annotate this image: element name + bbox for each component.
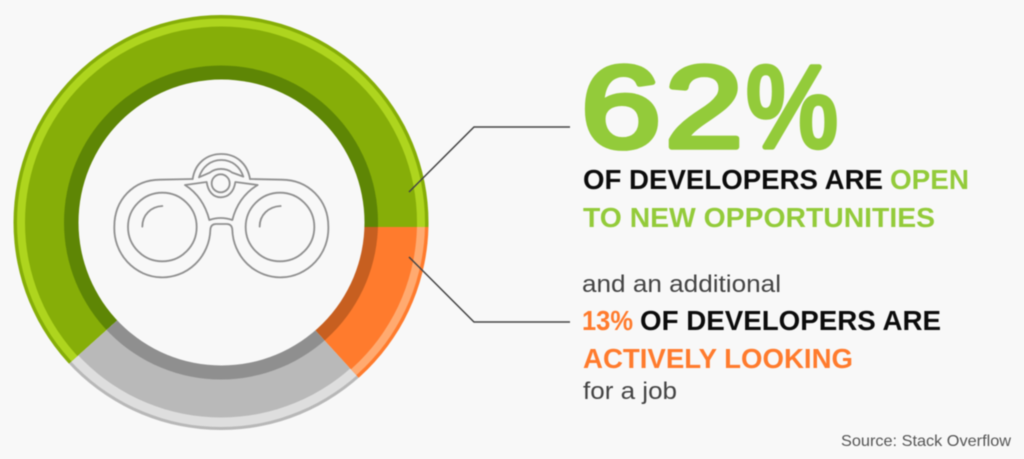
donut chart	[14, 15, 428, 430]
big statistic: 62%: %	[746, 42, 838, 172]
text block: open to new opportunities: OPEN	[890, 164, 969, 195]
big statistic: 62%	[581, 42, 838, 172]
text block: open to new opportunities: TO NEW OPPORTUNITIES	[583, 202, 935, 233]
leader line: 62% callout	[409, 127, 570, 192]
text block: actively looking: 13%	[582, 305, 633, 336]
segment: actively looking 13%	[315, 226, 430, 378]
text block: actively looking: OF DEVELOPERS ARE	[640, 305, 941, 336]
icon: binoculars	[114, 154, 328, 277]
text block: actively looking: for a job	[583, 378, 677, 405]
big statistic: 62%: 2	[665, 42, 743, 172]
source credit: Source: Stack Overflow	[841, 433, 1011, 450]
donut centre	[78, 80, 364, 366]
segment: open to new opportunities 62%	[12, 14, 430, 364]
segment: remaining developers	[69, 320, 359, 430]
text block: open to new opportunities: OF DEVELOPERS ARE	[583, 164, 883, 195]
leader line: 13% callout	[409, 257, 570, 322]
text block: actively looking: and an additional	[582, 271, 781, 298]
big statistic: 62%: 6	[581, 42, 661, 172]
text block: actively looking: ACTIVELY LOOKING	[583, 343, 853, 374]
text block: actively looking	[582, 271, 941, 405]
text block: open to new opportunities	[583, 164, 969, 233]
